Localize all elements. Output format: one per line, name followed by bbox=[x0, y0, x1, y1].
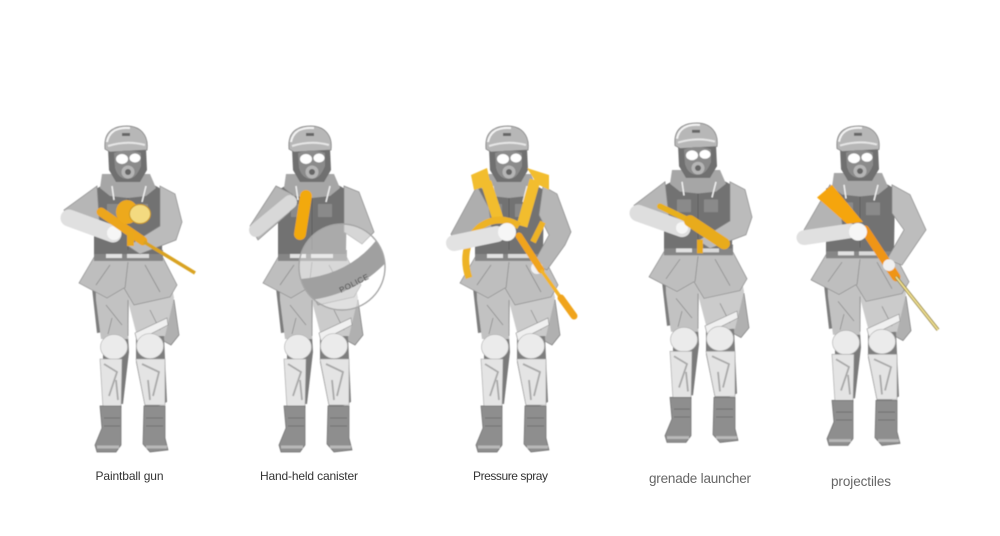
label: Pressure spray: Pressure spray bbox=[473, 469, 548, 483]
label: projectiles: projectiles bbox=[831, 474, 891, 489]
figure: officer with grenade launcher bbox=[634, 123, 752, 442]
left forearm bbox=[454, 234, 497, 243]
label: Hand-held canister: Hand-held canister bbox=[260, 469, 358, 483]
label: Paintball gun: Paintball gun bbox=[96, 469, 164, 483]
right arm bbox=[344, 186, 374, 244]
left forearm bbox=[804, 231, 850, 238]
spray backpack and hose bbox=[466, 168, 549, 278]
weapon: paintball gun bbox=[101, 200, 195, 273]
left forearm bbox=[256, 202, 290, 230]
right arm bbox=[887, 185, 926, 265]
label: grenade launcher: grenade launcher bbox=[649, 471, 752, 486]
figure: officer with hand-held canister and shield bbox=[250, 126, 385, 452]
weapon: canister bbox=[300, 196, 306, 234]
weapon: spray lance bbox=[519, 236, 574, 316]
officer base body bbox=[649, 123, 749, 442]
figure: officer with pressure spray bbox=[451, 126, 574, 452]
left arm bbox=[451, 186, 493, 250]
right arm bbox=[128, 186, 182, 254]
shield label: POLICE bbox=[338, 272, 371, 295]
right arm bbox=[533, 186, 571, 270]
left forearm bbox=[69, 218, 113, 234]
left arm bbox=[64, 186, 100, 232]
figure group: five riot police officers bbox=[64, 123, 938, 452]
right glove bbox=[531, 262, 543, 274]
right arm bbox=[698, 182, 752, 248]
left forearm bbox=[638, 213, 682, 229]
gloved hand bbox=[849, 223, 867, 241]
gloved hand bbox=[676, 222, 688, 234]
officer base body bbox=[79, 126, 179, 452]
figure: officer with projectile gun bbox=[804, 126, 938, 445]
gloved hand bbox=[107, 226, 121, 240]
left arm bbox=[250, 186, 292, 240]
right glove bbox=[883, 259, 895, 271]
gloved hand bbox=[498, 223, 516, 241]
shield bbox=[299, 224, 385, 310]
left arm bbox=[634, 182, 670, 227]
officer base body bbox=[811, 126, 911, 445]
left arm bbox=[804, 185, 844, 244]
weapon: grenade launcher bbox=[660, 206, 724, 253]
weapon: rifle bbox=[817, 185, 938, 330]
figure: officer with paintball gun bbox=[64, 126, 195, 452]
officer base body bbox=[263, 126, 363, 452]
officer base body bbox=[460, 126, 560, 452]
